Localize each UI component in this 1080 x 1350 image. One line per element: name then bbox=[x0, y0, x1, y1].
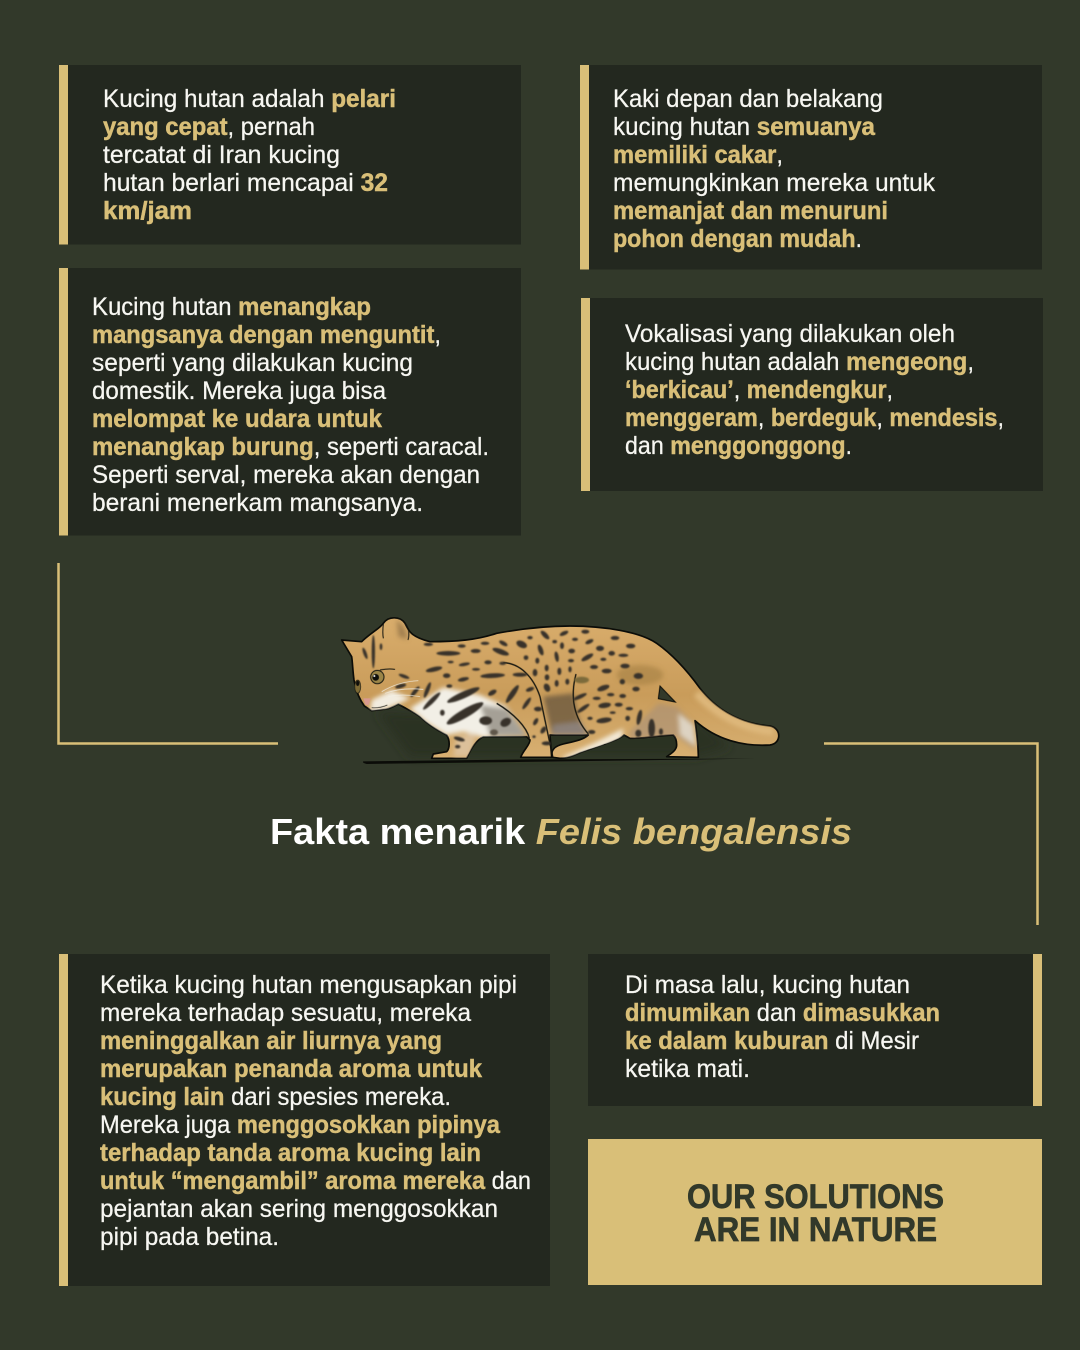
panel: cara berburu: melompat ke udara untuk bbox=[92, 405, 382, 433]
panel: pelari cepat: yang cepat, pernah bbox=[103, 113, 315, 141]
panel: cakar: memanjat dan menuruni bbox=[613, 197, 888, 225]
panel: penanda aroma: Ketika kucing hutan mengusapkan pipi bbox=[100, 971, 517, 999]
panel: cakar: memungkinkan mereka untuk bbox=[613, 169, 935, 197]
panel: cara berburu: seperti yang dilakukan kucing bbox=[92, 349, 413, 377]
panel: mumi di Mesir: Di masa lalu, kucing hutan bbox=[625, 971, 910, 999]
panel: vokalisasi bbox=[581, 298, 1043, 491]
panel: mumi di Mesir bbox=[588, 954, 1042, 1106]
panel: vokalisasi: ‘berkicau’, mendengkur, bbox=[625, 376, 893, 404]
decorative frame: right corner line bbox=[824, 744, 1038, 925]
panel: cakar: pohon dengan mudah. bbox=[613, 225, 862, 253]
panel: cara berburu bbox=[59, 268, 521, 536]
panel: cara berburu: Kucing hutan menangkap bbox=[92, 293, 371, 321]
title: Fakta menarik Felis bengalensis bbox=[270, 811, 852, 852]
panel: penanda aroma: terhadap tanda aroma kucing lain bbox=[100, 1139, 481, 1167]
panel: penanda aroma: pipi pada betina. bbox=[100, 1223, 279, 1251]
panel: vokalisasi: dan menggonggong. bbox=[625, 432, 852, 460]
panel: penanda aroma: untuk “mengambil” aroma mereka dan bbox=[100, 1167, 531, 1195]
cat eyes and nose bbox=[355, 669, 423, 708]
panel: cara berburu: mangsanya dengan menguntit, bbox=[92, 321, 441, 349]
panel: mumi di Mesir: ketika mati. bbox=[625, 1055, 750, 1083]
panel: penanda aroma: pejantan akan sering menggosokkan bbox=[100, 1195, 498, 1223]
panel: pelari cepat: hutan berlari mencapai 32 bbox=[103, 169, 388, 197]
panel: cara berburu: menangkap burung, seperti caracal. bbox=[92, 433, 489, 461]
panel: pelari cepat bbox=[59, 65, 521, 244]
panel: penanda aroma bbox=[59, 954, 550, 1286]
panel: cara berburu: domestik. Mereka juga bisa bbox=[92, 377, 386, 405]
callout: our solutions: ARE IN NATURE bbox=[694, 1211, 937, 1249]
panel: vokalisasi: kucing hutan adalah mengeong, bbox=[625, 348, 974, 376]
panel: pelari cepat: km/jam bbox=[103, 197, 192, 225]
panel: penanda aroma: Mereka juga menggosokkan pipinya bbox=[100, 1111, 501, 1139]
panel: cakar: Kaki depan dan belakang bbox=[613, 85, 883, 113]
panel: pelari cepat: Kucing hutan adalah pelari bbox=[103, 85, 396, 113]
panel: penanda aroma: kucing lain dari spesies mereka. bbox=[100, 1083, 451, 1111]
panel: mumi di Mesir: ke dalam kuburan di Mesir bbox=[625, 1027, 919, 1055]
decorative frame: left corner line bbox=[58, 563, 278, 744]
panel: penanda aroma: meninggalkan air liurnya yang bbox=[100, 1027, 442, 1055]
panel: pelari cepat: tercatat di Iran kucing bbox=[103, 141, 340, 169]
panel: cakar: kucing hutan semuanya bbox=[613, 113, 876, 141]
panel: cakar bbox=[580, 65, 1042, 270]
callout: our solutions: OUR SOLUTIONS bbox=[687, 1178, 944, 1216]
callout: our solutions bbox=[588, 1139, 1042, 1285]
panel: cara berburu: berani menerkam mangsanya. bbox=[92, 489, 423, 517]
panel: penanda aroma: merupakan penanda aroma untuk bbox=[100, 1055, 482, 1083]
panel: vokalisasi: menggeram, berdeguk, mendesis, bbox=[625, 404, 1004, 432]
panel: cara berburu: Seperti serval, mereka akan dengan bbox=[92, 461, 480, 489]
panel: vokalisasi: Vokalisasi yang dilakukan oleh bbox=[625, 320, 955, 348]
cat spots bbox=[361, 629, 663, 748]
panel: cakar: memiliki cakar, bbox=[613, 141, 783, 169]
panel: penanda aroma: mereka terhadap sesuatu, mereka bbox=[100, 999, 471, 1027]
panel: mumi di Mesir: dimumikan dan dimasukkan bbox=[625, 999, 940, 1027]
cat fur shading bbox=[370, 620, 773, 759]
illustration: leopard cat bbox=[342, 618, 779, 764]
